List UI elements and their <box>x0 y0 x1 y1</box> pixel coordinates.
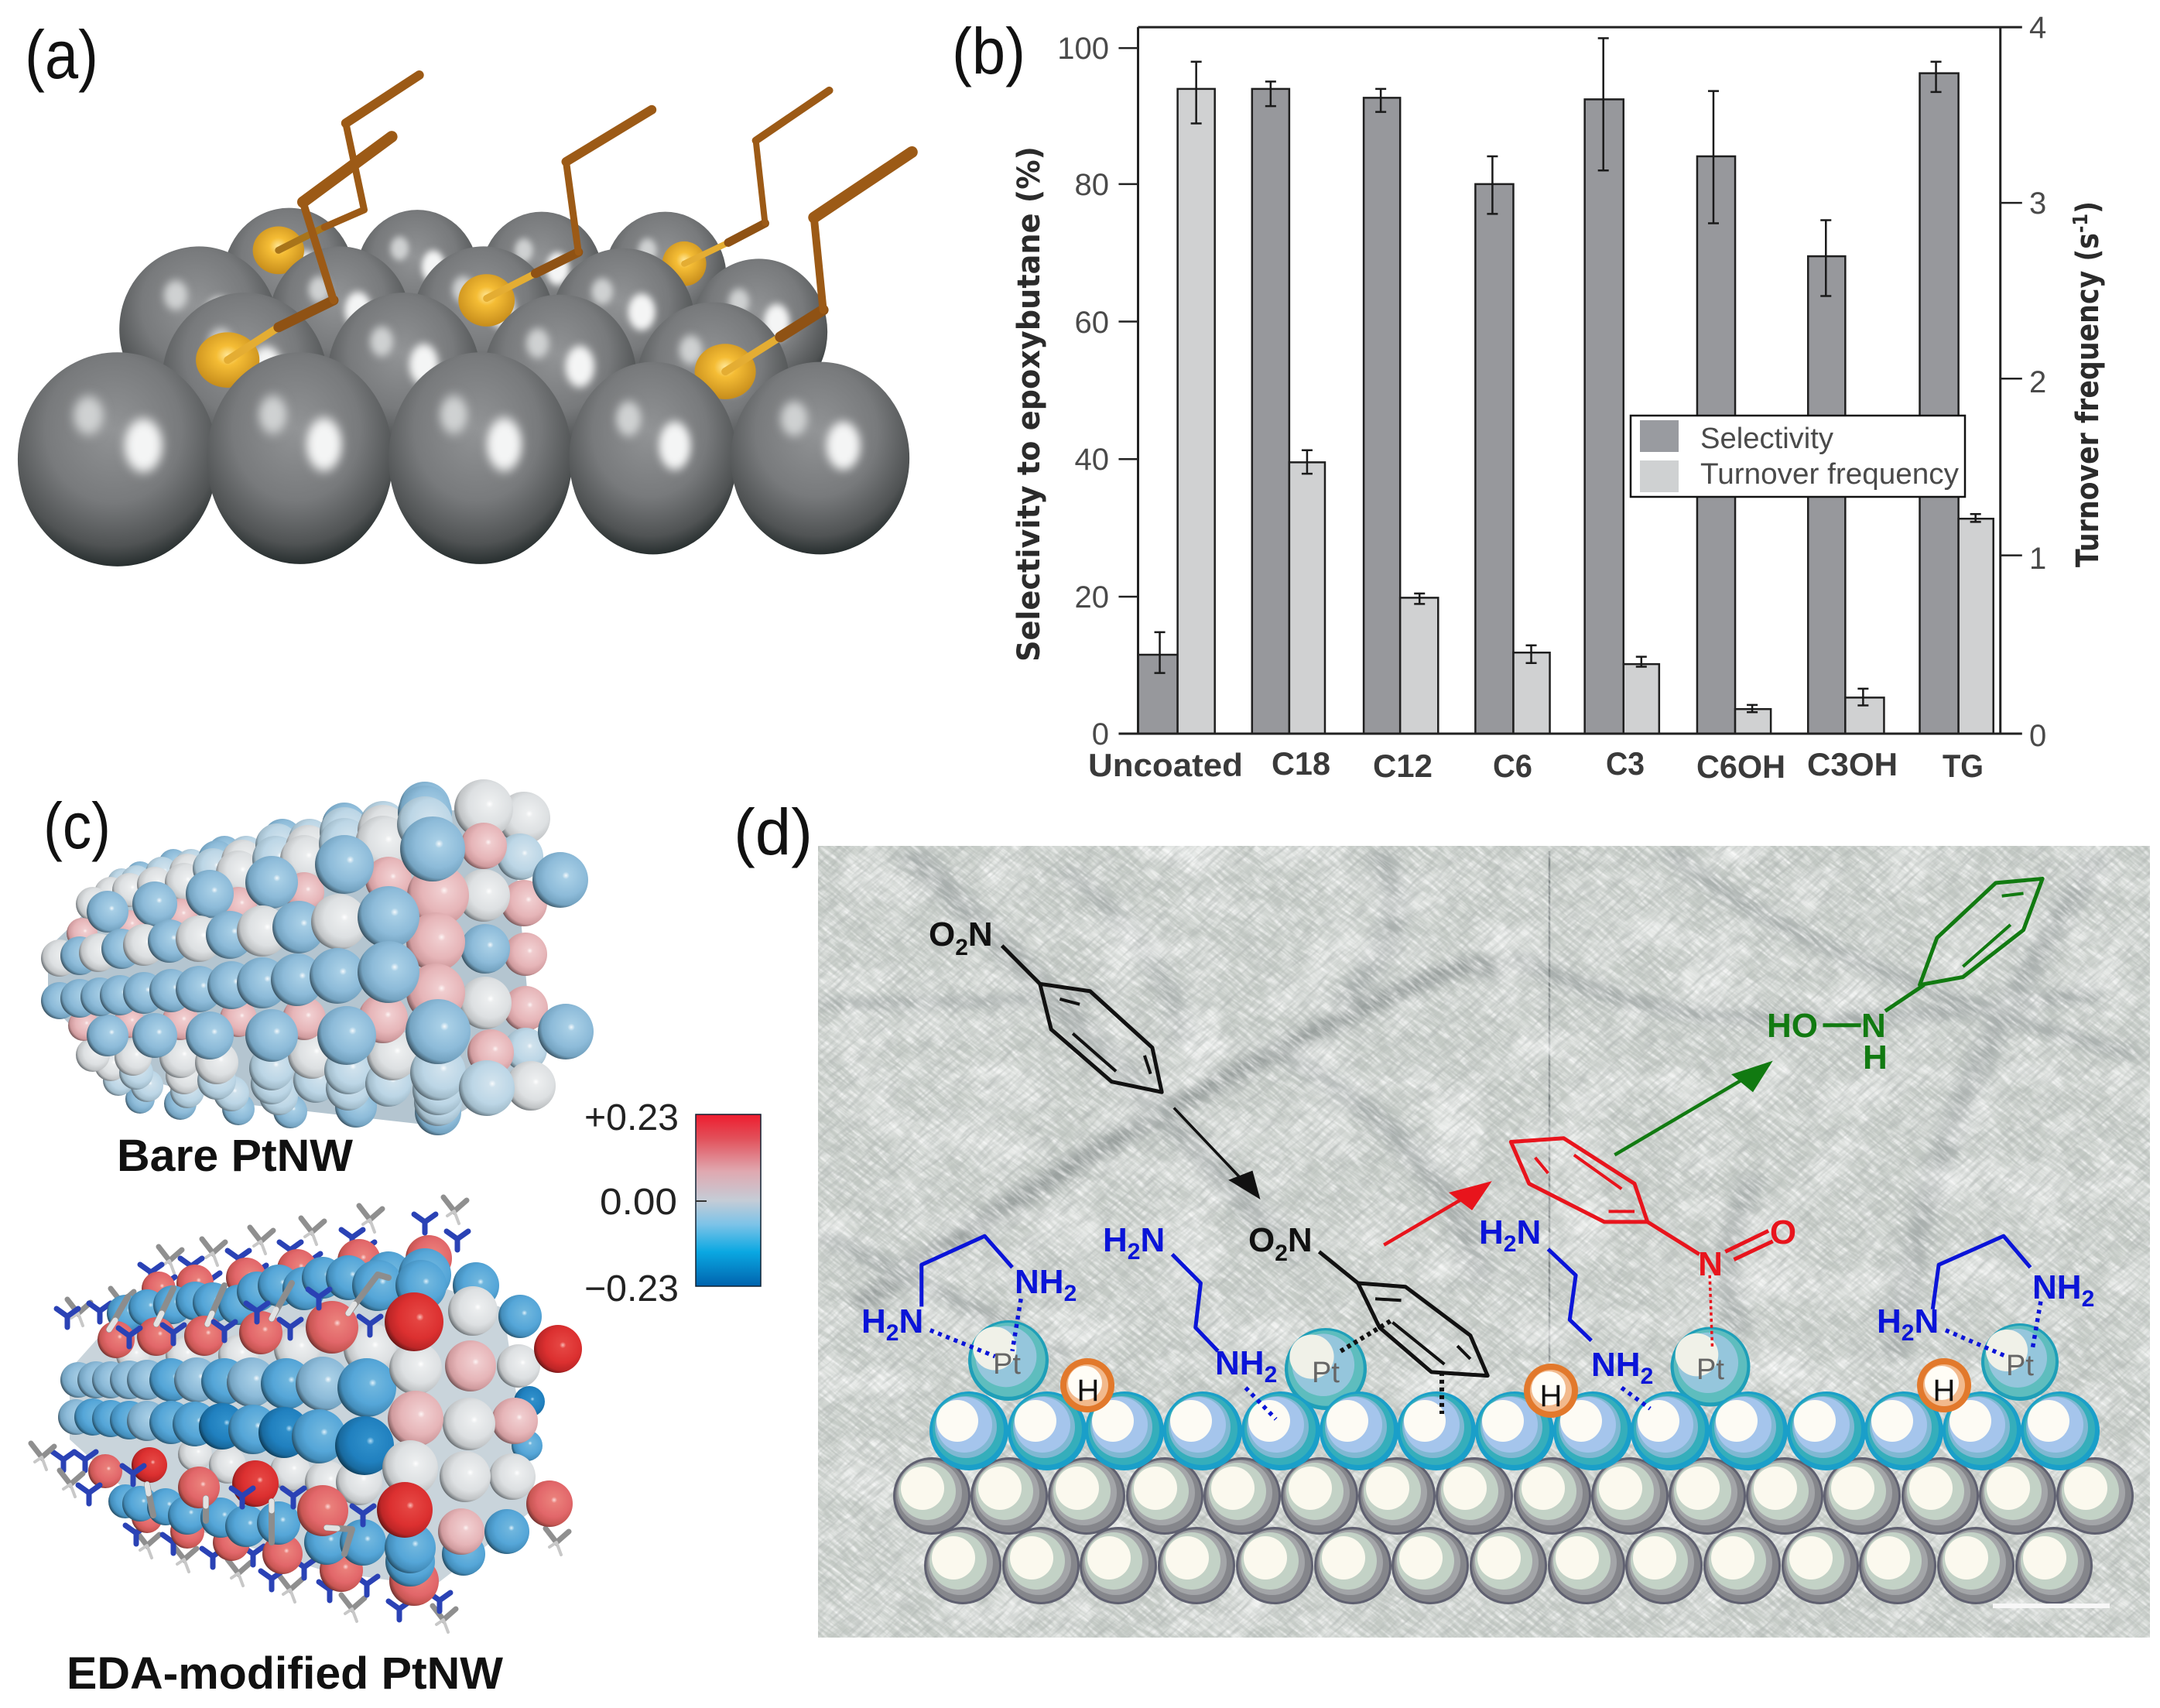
molecule: nitroarene, free: 2 <box>955 935 968 960</box>
left axis tick labels <box>1057 32 1109 751</box>
axial blue rows <box>58 1357 396 1475</box>
EDA ligands: 2 <box>1128 1239 1140 1265</box>
panel d: reaction scheme on Pt nanowires <box>818 846 2150 1638</box>
bars: selectivity <box>1138 74 1959 734</box>
left axis tick labels: 0 <box>1092 717 1109 751</box>
end face atoms <box>377 1235 582 1606</box>
EDA ligands: 2 <box>886 1320 899 1346</box>
right axis tick labels: 0 <box>2029 719 2046 753</box>
category labels: C3OH <box>1807 746 1898 782</box>
right axis title: ) <box>2070 201 2106 214</box>
salmon and red row, top <box>98 1301 358 1358</box>
scale labels: −0.23 <box>584 1268 679 1309</box>
front large atoms <box>358 816 471 1064</box>
molecule: adsorbed nitroarene: O <box>1248 1221 1275 1259</box>
axial rows <box>41 894 367 1019</box>
EDA ligands: 2 <box>1504 1231 1516 1257</box>
colour bar <box>696 1114 761 1286</box>
back EDA molecules, bottom <box>125 1525 569 1632</box>
EDA ligands: H <box>1103 1221 1128 1259</box>
EDA ligands: H <box>861 1302 886 1340</box>
category labels: C6OH <box>1696 748 1785 785</box>
far end-column atoms <box>497 792 550 880</box>
Pt adatom labels: Pt <box>993 1348 1021 1381</box>
left axis tick labels: 20 <box>1074 580 1109 614</box>
third row of metal atoms <box>163 293 789 466</box>
EDA ligands <box>861 1213 2094 1419</box>
EDA ligands: N <box>1140 1221 1165 1259</box>
nanowire backing shape <box>48 805 534 1126</box>
EDA ligands: 2 <box>1265 1362 1277 1388</box>
arrow: reduction to hydroxylamine <box>1614 1061 1773 1155</box>
alkyl thiol chains <box>228 75 912 371</box>
hydrogen atoms <box>1060 1358 1971 1418</box>
end face atoms <box>406 779 594 1116</box>
Pt adatoms <box>968 1320 2059 1410</box>
EDA ligands: 2 <box>1641 1364 1653 1389</box>
EDA ligands: H <box>1479 1213 1504 1251</box>
molecule: phenylhydroxylamine product <box>1767 878 2042 1076</box>
upper back atom stacks <box>76 782 453 921</box>
category labels: C6 <box>1493 748 1532 784</box>
molecule: nitroso intermediate <box>1511 1138 1796 1348</box>
scale labels: 0.00 <box>600 1182 677 1223</box>
EDA ligands: 2 <box>1902 1320 1914 1346</box>
molecule: adsorbed nitroarene: N <box>1288 1221 1313 1259</box>
lower grey atom row <box>924 1527 2093 1604</box>
colour scale <box>584 1097 761 1309</box>
panel b: bar chart of selectivity and turnover frequency <box>1012 11 2106 785</box>
panel a: molecular model of thiol monolayer on a metal surface <box>18 75 912 566</box>
right axis tick labels: 2 <box>2029 365 2046 399</box>
EDA ligands: NH <box>1591 1346 1641 1384</box>
category labels: TG <box>1943 748 1984 784</box>
hydrogen atoms: H <box>1540 1379 1562 1413</box>
back EDA molecules, top <box>56 1197 468 1327</box>
scale labels <box>584 1097 679 1309</box>
molecule: nitroso intermediate: O <box>1770 1213 1796 1251</box>
EDA ligands: H <box>1877 1302 1902 1340</box>
bars: turnover frequency <box>1178 89 1994 734</box>
molecule: nitroarene, free: N <box>968 916 993 953</box>
caption: EDA-modified PtNW: EDA-modified PtNW <box>67 1648 503 1699</box>
front EDA molecules <box>31 1275 389 1554</box>
right axis tick labels <box>2029 11 2046 753</box>
hydrogen atoms: H <box>1933 1374 1955 1408</box>
front row of metal atoms <box>18 352 909 566</box>
sulfur atoms, back <box>253 227 707 286</box>
molecule: nitroso intermediate: N <box>1698 1245 1723 1283</box>
hydrogen atoms: H <box>1077 1374 1099 1408</box>
legend: Selectivity <box>1700 423 1833 455</box>
panel label (b): (b) <box>952 15 1025 87</box>
right axis tick labels: 3 <box>2029 187 2046 221</box>
left axis title: Selectivity to epoxybutane (%) <box>1012 146 1047 662</box>
molecule: phenylhydroxylamine product: N <box>1861 1007 1886 1045</box>
EDA ligands: 2 <box>2082 1286 2094 1312</box>
molecule: phenylhydroxylamine product: H <box>1863 1039 1888 1076</box>
molecule: nitroarene, free <box>929 916 1162 1092</box>
salmon and red row, bottom <box>88 1447 348 1536</box>
right axis title: Turnover frequency (s <box>2070 183 2106 567</box>
molecule: phenylhydroxylamine product: HO <box>1767 1007 1818 1045</box>
back pink atoms <box>132 1239 381 1592</box>
category labels: Uncoated <box>1088 747 1243 783</box>
EDA ligands: 2 <box>1064 1281 1077 1306</box>
right axis title: -1 <box>2069 214 2093 233</box>
white atoms between rows <box>116 1323 396 1505</box>
sulfur atom, middle <box>458 274 515 327</box>
axes and tick marks <box>1118 27 2022 734</box>
textured nanowire background <box>818 846 2150 1638</box>
panel label (a): (a) <box>25 16 98 93</box>
EDA ligands: N <box>1914 1302 1939 1340</box>
category labels: C18 <box>1272 745 1330 782</box>
arrow: adsorption <box>1174 1108 1261 1200</box>
caption: Bare PtNW: Bare PtNW <box>117 1131 353 1181</box>
legend <box>1631 416 1965 497</box>
category labels: C3 <box>1606 745 1645 782</box>
error bars <box>1155 38 1981 712</box>
arrow: reduction to nitroso <box>1384 1181 1492 1245</box>
sulfur atoms, front <box>196 332 756 399</box>
right axis tick labels: 4 <box>2029 11 2046 45</box>
category labels: C12 <box>1373 748 1433 784</box>
back row of metal atoms <box>224 208 727 347</box>
panel label (c): (c) <box>43 789 111 862</box>
back blue atoms <box>107 1251 412 1566</box>
Pt adatom labels: Pt <box>1312 1357 1340 1389</box>
left axis tick labels: 40 <box>1074 443 1109 477</box>
Pt adatom labels: Pt <box>2006 1350 2034 1382</box>
category labels <box>1088 745 1984 785</box>
right axis tick labels: 1 <box>2029 542 2046 576</box>
molecule: adsorbed nitroarene <box>1248 1221 1487 1414</box>
scale labels: +0.23 <box>584 1097 679 1138</box>
left axis tick labels: 100 <box>1057 32 1109 66</box>
top and bottom blue rows <box>87 835 376 1065</box>
EDA ligands: N <box>899 1302 923 1340</box>
panel c: bare platinum nanowire charge map <box>41 779 594 1135</box>
Pt adatom labels <box>993 1348 2034 1389</box>
nanowire backing shape <box>70 1269 534 1586</box>
scale bar <box>1993 1604 2110 1608</box>
molecule: nitroarene, free: O <box>929 916 955 953</box>
EDA ligands: N <box>1516 1213 1541 1251</box>
left axis tick labels: 60 <box>1074 306 1109 340</box>
second row of metal atoms <box>119 246 827 412</box>
Pt adatom labels: Pt <box>1696 1354 1724 1386</box>
panel label (d): (d) <box>734 796 813 868</box>
lower back atom stacks <box>76 1029 466 1135</box>
panel c: EDA-modified platinum nanowire charge map <box>31 1197 582 1632</box>
legend: Turnover frequency <box>1700 458 1959 491</box>
blue surface atom row <box>929 1391 2100 1470</box>
EDA ligands: NH <box>1215 1344 1265 1382</box>
molecule: adsorbed nitroarene: 2 <box>1275 1241 1288 1266</box>
EDA ligands: NH <box>2032 1268 2082 1306</box>
EDA ligands: NH <box>1015 1263 1064 1301</box>
left axis tick labels: 80 <box>1074 168 1109 202</box>
upper grey atom row <box>893 1457 2134 1535</box>
pink interstitial atoms <box>67 857 412 1043</box>
